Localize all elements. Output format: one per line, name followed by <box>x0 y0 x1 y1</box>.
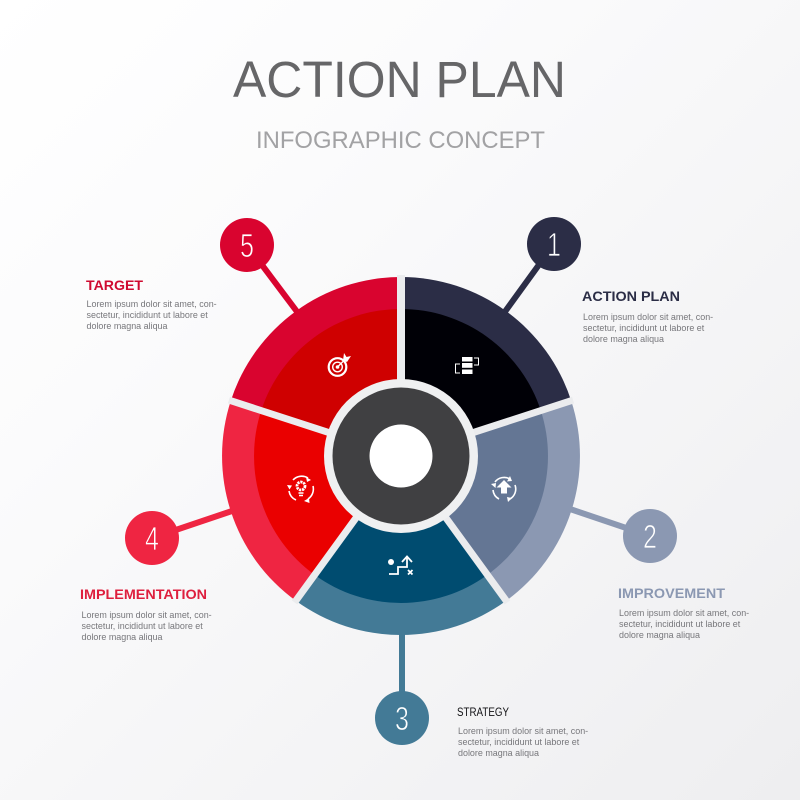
badge 1 <box>527 217 581 271</box>
badge 2 <box>623 509 677 563</box>
text block: strategy: sectetur, incididunt ut labore et <box>458 737 580 747</box>
icon: bulb with gear <box>287 476 313 503</box>
title: ACTION PLAN <box>233 51 566 108</box>
text block: target: Lorem ipsum dolor sit amet, con- <box>86 299 217 309</box>
badge 4 <box>125 511 179 565</box>
text block: action plan: Lorem ipsum dolor sit amet, con- <box>583 312 713 322</box>
text block: action plan: dolore magna aliqua <box>583 334 664 344</box>
badge 3 <box>375 691 429 745</box>
central hub <box>324 379 478 533</box>
text block: action plan: ACTION PLAN <box>582 288 680 304</box>
text block: improvement: Lorem ipsum dolor sit amet, con- <box>619 608 749 618</box>
text block: improvement: IMPROVEMENT <box>618 585 725 601</box>
badge 5 <box>220 218 274 272</box>
text block: implementation: IMPLEMENTATION <box>80 586 207 602</box>
text block: target: TARGET <box>86 277 143 293</box>
text block: target: dolore magna aliqua <box>86 321 168 331</box>
text block: strategy: dolore magna aliqua <box>458 748 539 758</box>
icon: target with arrow <box>329 353 351 376</box>
segment 5: target <box>231 277 401 456</box>
segment 2: improvement <box>401 401 580 601</box>
subtitle: INFOGRAPHIC CONCEPT <box>256 127 545 154</box>
text block: action plan: sectetur, incididunt ut labore et <box>583 323 705 333</box>
segment 4: implementation <box>222 401 401 601</box>
icon: circular arrows with up arrow <box>491 476 516 502</box>
badge 1: 1 <box>547 227 561 264</box>
icon: process list <box>456 357 478 374</box>
text block: improvement <box>618 585 749 640</box>
connector: step 2 <box>570 509 650 536</box>
connector: step 5 <box>247 245 298 313</box>
connector: step 3 <box>399 633 405 718</box>
text block: target: sectetur, incididunt ut labore et <box>86 310 208 320</box>
text block: action plan <box>582 288 713 344</box>
text block: implementation <box>80 586 212 642</box>
badge 3: 3 <box>395 701 409 738</box>
segment 3: strategy <box>296 456 506 635</box>
text block: implementation: Lorem ipsum dolor sit amet, con- <box>82 610 212 620</box>
text block: implementation: sectetur, incididunt ut labore et <box>82 621 203 631</box>
segment 1: action plan <box>401 277 571 456</box>
badge 5: 5 <box>240 228 254 265</box>
text block: strategy <box>457 707 588 758</box>
text block: implementation: dolore magna aliqua <box>82 632 163 642</box>
badge 2: 2 <box>643 519 657 556</box>
text block: improvement: sectetur, incididunt ut labore et <box>619 619 741 629</box>
connector: step 4 <box>152 511 232 538</box>
text block: target <box>86 277 217 331</box>
connector: step 1 <box>504 244 554 313</box>
text block: strategy: Lorem ipsum dolor sit amet, con- <box>458 726 588 736</box>
text block: improvement: dolore magna aliqua <box>619 630 700 640</box>
icon: strategy path <box>388 556 412 574</box>
badge 4: 4 <box>145 521 159 558</box>
text block: strategy: STRATEGY <box>457 707 509 719</box>
